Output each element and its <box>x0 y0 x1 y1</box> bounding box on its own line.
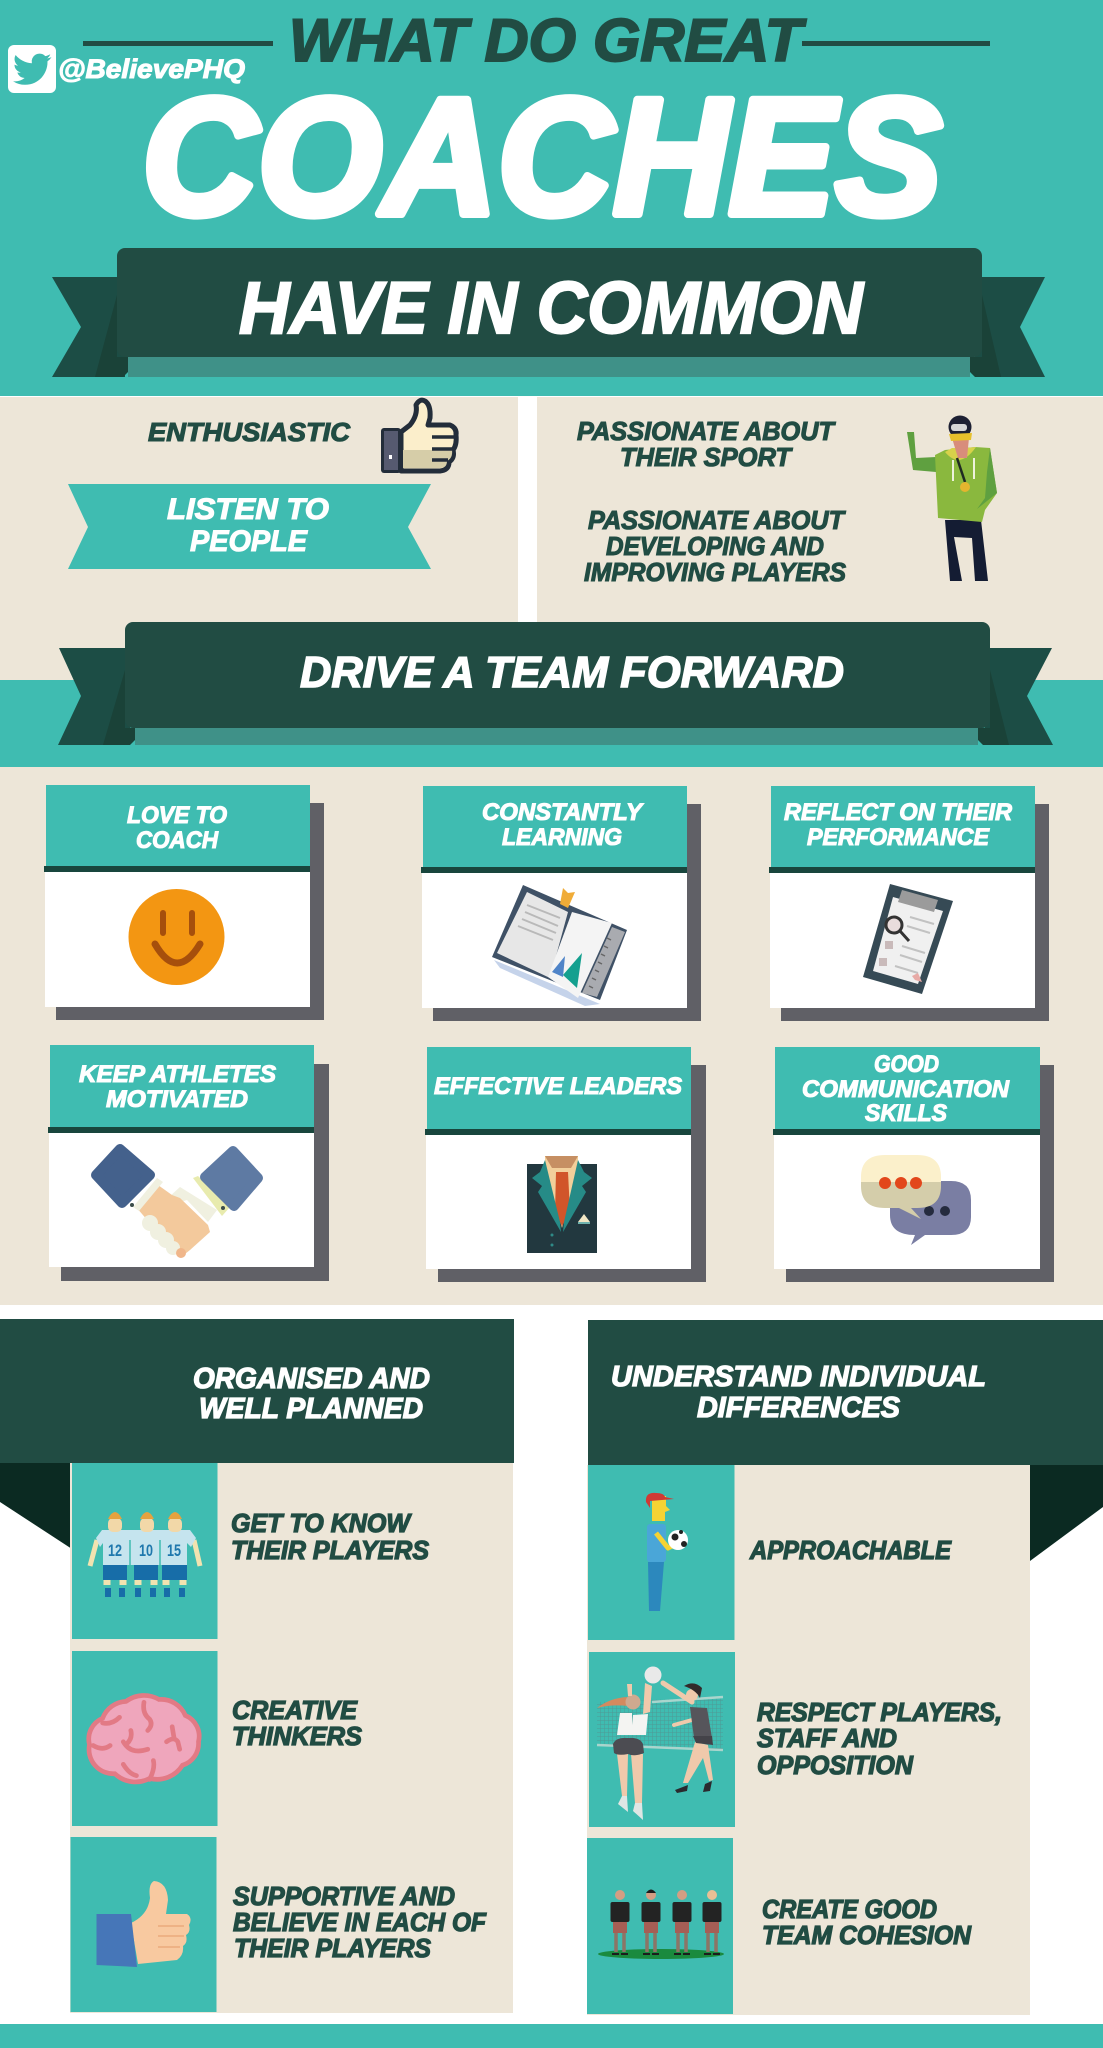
ribbon fold: right <box>1030 1465 1103 1561</box>
row: supportive: BELIEVE IN EACH OF <box>233 1907 487 1937</box>
icon: coach with ball <box>646 1493 688 1611</box>
panel: understand individual differences <box>587 1320 1103 2015</box>
icon: thumbs up <box>381 400 456 473</box>
text: passionate about their sport <box>577 418 836 472</box>
card: good communication skills: SKILLS <box>865 1100 947 1127</box>
icon: three players: 12 <box>108 1541 122 1560</box>
icon: three players: 15 <box>167 1541 181 1560</box>
row: supportive <box>70 1837 487 2012</box>
row: team cohesion: CREATE GOOD <box>762 1894 937 1924</box>
ribbon fold: left <box>0 1463 72 1549</box>
icon: speech bubbles <box>861 1155 971 1245</box>
row: approachable <box>588 1465 952 1640</box>
text: enthusiastic: ENTHUSIASTIC <box>148 417 351 447</box>
panel: enthusiastic and listen <box>0 397 518 680</box>
ribbon: have in common <box>52 248 1045 377</box>
icon: open book <box>492 885 627 1006</box>
icon: thumbs up hand <box>96 1881 191 1967</box>
text: passionate about developing <box>584 507 846 587</box>
panel: organised and well planned <box>0 1319 514 2013</box>
card: keep athletes motivated: KEEP ATHLETES <box>79 1061 276 1088</box>
row: supportive: SUPPORTIVE AND <box>233 1881 455 1911</box>
row: get to know their players: THEIR PLAYERS <box>231 1535 430 1565</box>
card: keep athletes motivated: MOTIVATED <box>106 1086 248 1113</box>
card: good communication skills: GOOD <box>874 1051 939 1078</box>
header: understand: UNDERSTAND INDIVIDUAL <box>611 1361 986 1393</box>
row: approachable: APPROACHABLE <box>749 1535 952 1565</box>
card: love to coach: LOVE TO <box>127 802 227 829</box>
row: supportive: THEIR PLAYERS <box>234 1933 432 1963</box>
row: creative thinkers <box>72 1651 363 1826</box>
icon: coach with whistle <box>907 416 997 581</box>
row: respect players: STAFF AND <box>757 1723 897 1753</box>
card: constantly learning: LEARNING <box>502 824 622 851</box>
title: what do great <box>83 7 990 74</box>
header: organised <box>0 1319 514 1463</box>
twitter handle: @BelievePHQ <box>58 54 245 84</box>
header: organised: ORGANISED AND <box>193 1363 430 1395</box>
icon: brain <box>89 1695 199 1782</box>
panel: passionate <box>537 397 1103 680</box>
card: effective leaders: EFFECTIVE LEADERS <box>434 1073 682 1100</box>
card: keep athletes motivated <box>48 1045 329 1281</box>
icon: clipboard <box>863 884 953 994</box>
header: organised: WELL PLANNED <box>199 1393 423 1425</box>
icon: three players: 10 <box>139 1541 153 1560</box>
row: creative thinkers: THINKERS <box>232 1721 363 1751</box>
text: passionate about their sport: THEIR SPORT <box>620 444 793 472</box>
card: love to coach <box>44 785 324 1020</box>
row: get to know their players <box>72 1463 430 1639</box>
text: passionate about their sport: PASSIONATE ABOUT <box>577 418 836 446</box>
row: respect players: RESPECT PLAYERS, <box>757 1697 1002 1727</box>
row: respect players: OPPOSITION <box>757 1750 914 1780</box>
footer band <box>0 2024 1103 2048</box>
row: respect players <box>589 1652 1002 1827</box>
row: team cohesion: TEAM COHESION <box>762 1920 972 1950</box>
icon: suit and tie <box>527 1156 597 1253</box>
card: reflect on their performance: PERFORMANCE <box>807 824 990 851</box>
card: constantly learning <box>421 786 701 1021</box>
banner: listen to people: PEOPLE <box>190 525 308 558</box>
ribbon: drive a team forward <box>58 622 1053 745</box>
icon: volleyball players <box>597 1666 723 1820</box>
panel: six quality cards <box>0 767 1103 1305</box>
icon: three players <box>90 1512 200 1597</box>
row: creative thinkers: CREATIVE <box>232 1695 358 1725</box>
icon: handshake <box>96 1149 258 1258</box>
divider strip: teal band behind ribbon <box>0 680 1103 767</box>
card: constantly learning: CONSTANTLY <box>482 799 644 826</box>
card: love to coach: COACH <box>136 827 219 854</box>
icon: twitter badge <box>8 45 56 93</box>
card: reflect on their performance <box>769 786 1049 1021</box>
card: effective leaders <box>425 1047 706 1282</box>
row: team cohesion <box>587 1838 972 2014</box>
header: understand: DIFFERENCES <box>697 1392 901 1424</box>
text: passionate about developing: IMPROVING PLAYERS <box>584 559 846 587</box>
title: coaches: COACHES <box>142 65 942 250</box>
icon: four team players <box>598 1890 724 1959</box>
title: what do great: WHAT DO GREAT <box>289 7 806 74</box>
ribbon: drive a team forward: DRIVE A TEAM FORWARD <box>300 648 844 697</box>
banner: listen to people: LISTEN TO <box>167 493 329 526</box>
ribbon: have in common: HAVE IN COMMON <box>239 268 864 349</box>
header: understand <box>588 1320 1103 1465</box>
text: passionate about developing: PASSIONATE ABOUT <box>588 507 846 535</box>
banner: listen to people <box>68 484 431 569</box>
panel: header band <box>0 0 1103 396</box>
card: reflect on their performance: REFLECT ON THEIR <box>784 799 1013 826</box>
card: good communication skills: COMMUNICATION <box>802 1076 1010 1103</box>
row: get to know their players: GET TO KNOW <box>231 1508 412 1538</box>
card: good communication skills <box>773 1047 1054 1282</box>
icon: smiley <box>128 889 224 985</box>
text: passionate about developing: DEVELOPING AND <box>606 533 824 561</box>
